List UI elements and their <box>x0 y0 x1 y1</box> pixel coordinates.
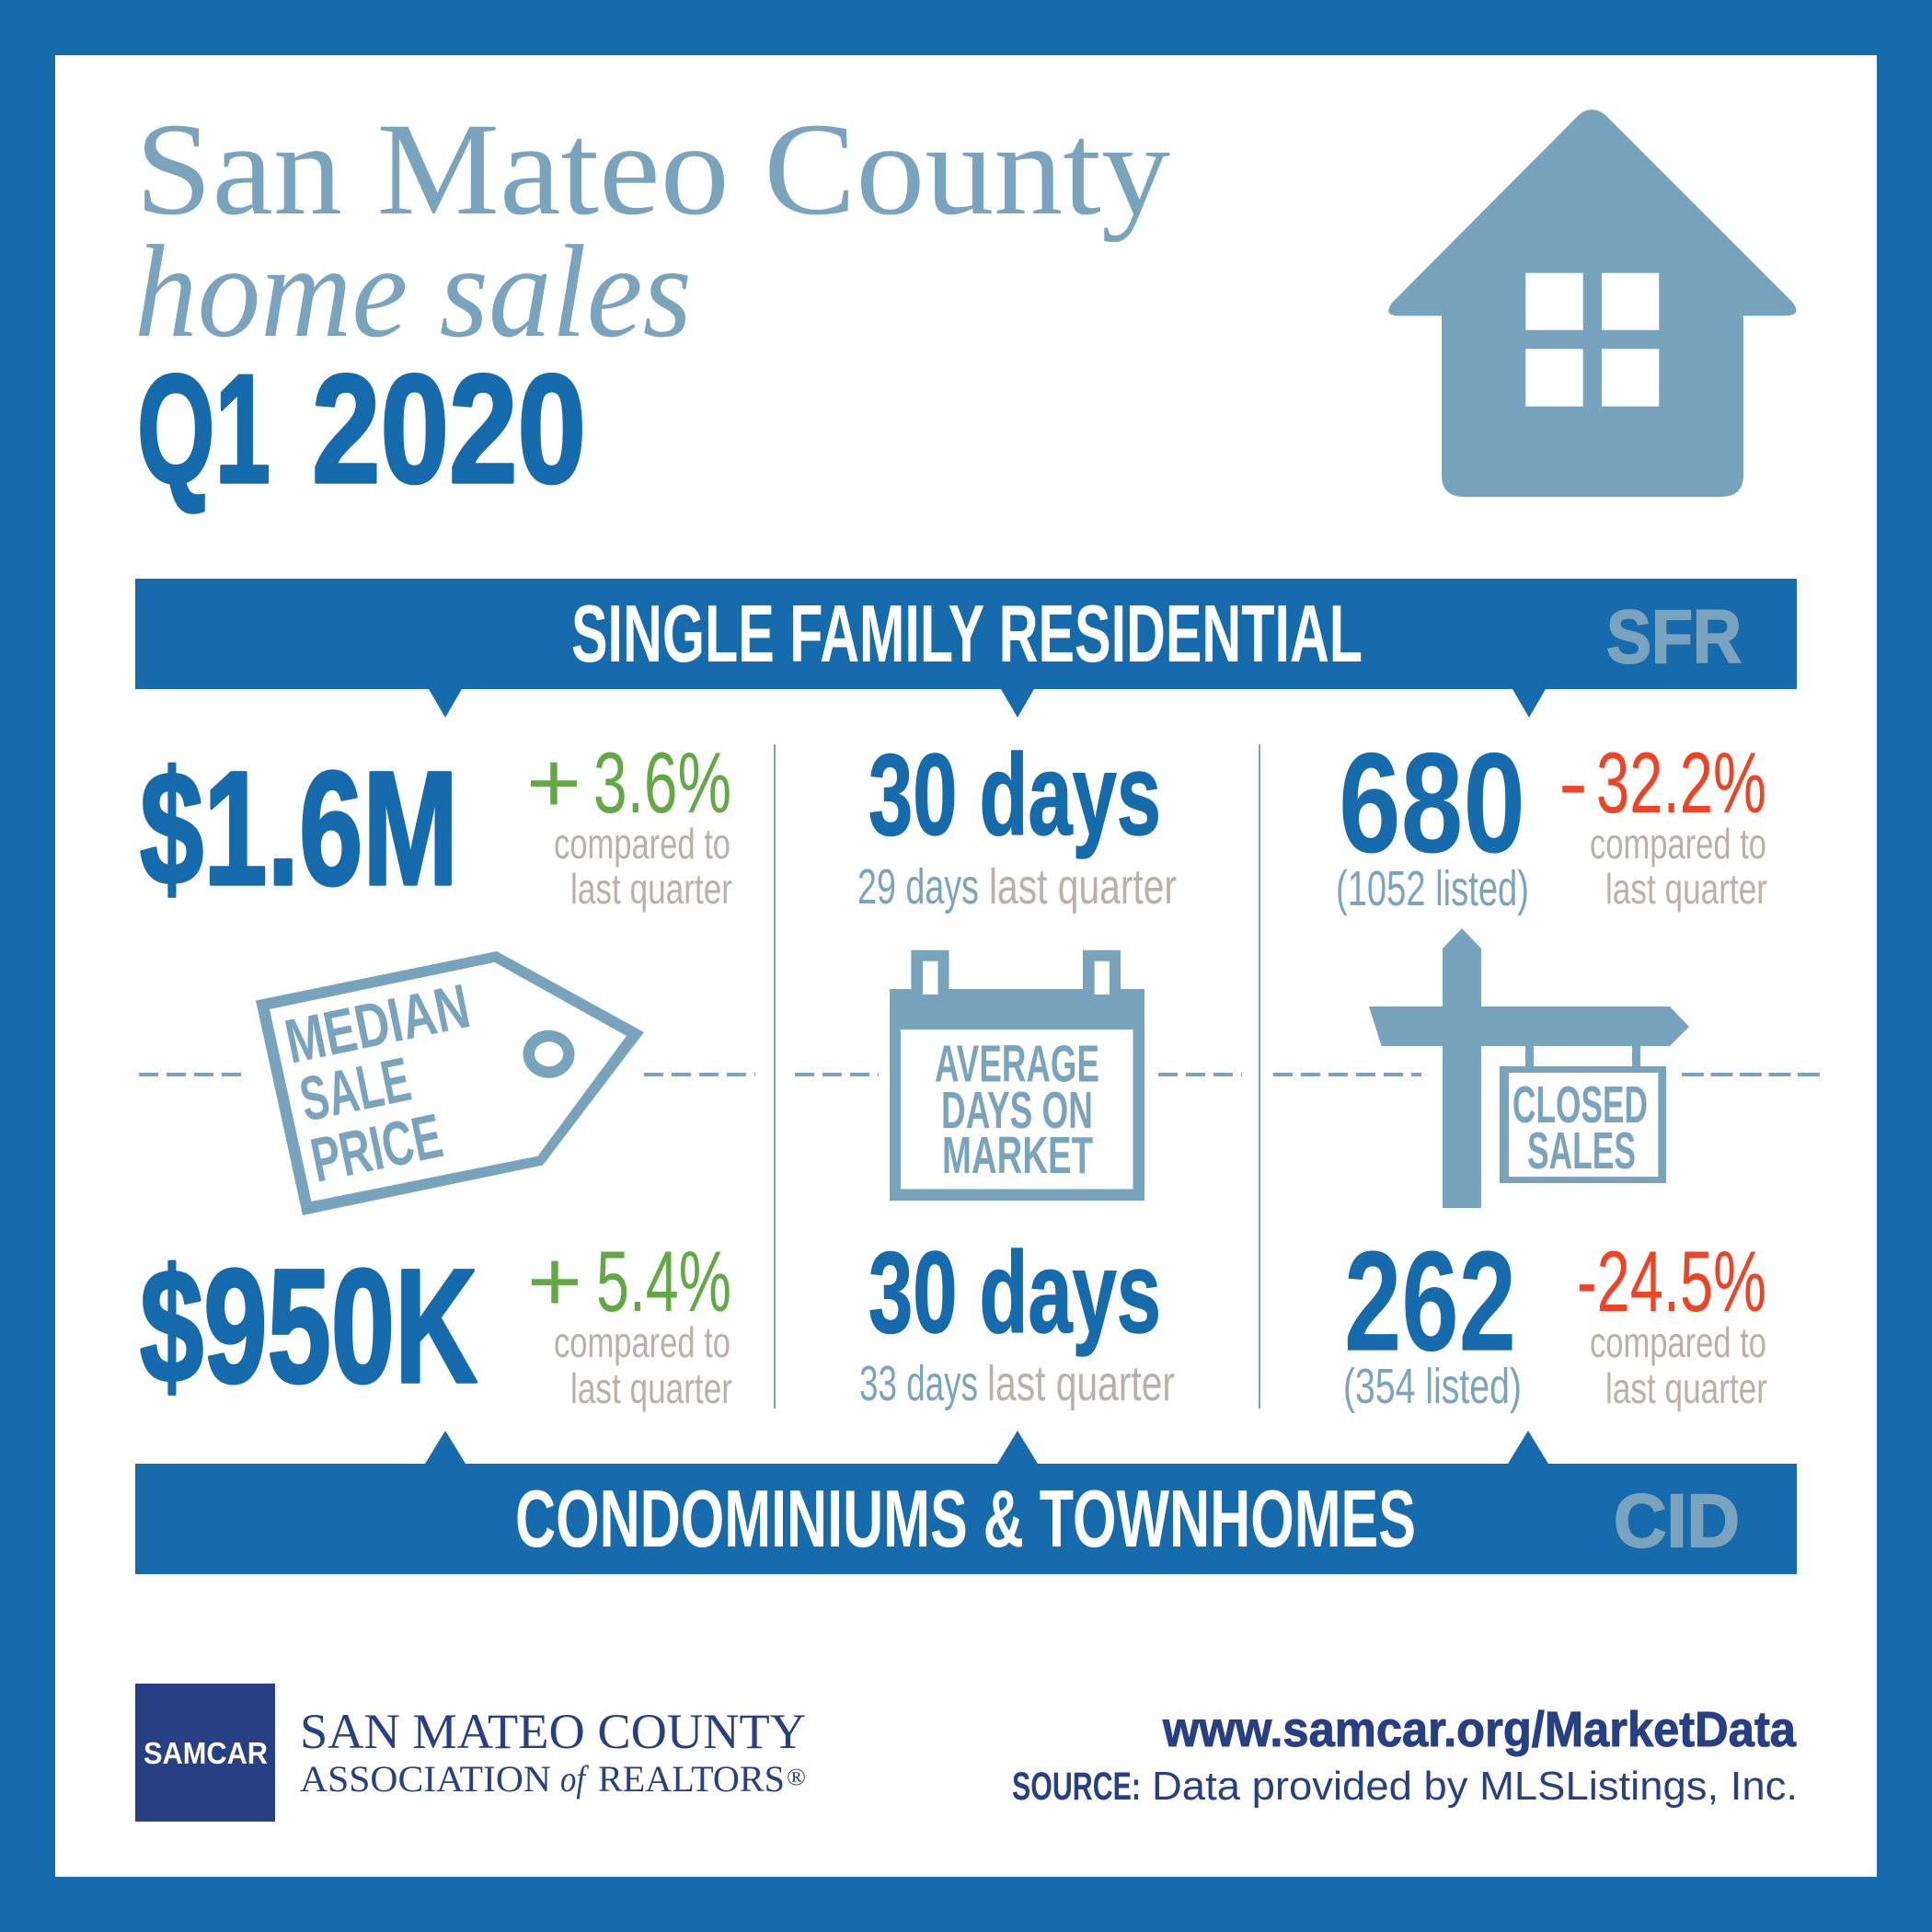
SFR closed sales: last quarter <box>1605 865 1767 913</box>
CID closed sales: last quarter <box>1605 1364 1767 1412</box>
CID median sale price: 5.4% <box>596 1233 731 1329</box>
CID closed sales: (354 listed) <box>1343 1359 1522 1414</box>
source note: Data provided by MLSListings, Inc. <box>1152 1764 1798 1809</box>
SFR average days on market: 30 days <box>868 731 1161 859</box>
icon: for sale sign: SALES <box>1527 1121 1636 1180</box>
CID average days on market: 33 days <box>859 1356 978 1411</box>
icon: price tag: PRICE <box>305 1100 448 1196</box>
banner: single family residential <box>135 579 1797 718</box>
organization name: of <box>560 1758 589 1800</box>
CID median sale price: $950K <box>140 1236 477 1417</box>
SFR median sale price: last quarter <box>570 865 732 913</box>
SFR closed sales: 32.2% <box>1596 734 1766 831</box>
CID closed sales: -24.5% <box>1577 1233 1766 1329</box>
organization name <box>300 1704 806 1800</box>
banner: single family residential: SINGLE FAMILY RESIDENTIAL <box>571 588 1363 679</box>
CID median sale price: compared to <box>554 1318 730 1366</box>
SFR median sale price: 3.6% <box>593 734 731 831</box>
CID average days on market: last quarter <box>987 1356 1175 1411</box>
organization name: ® <box>787 1764 806 1790</box>
SFR median sale price: + <box>526 734 581 831</box>
CID median sale price: last quarter <box>570 1364 732 1412</box>
CID closed sales <box>1343 1222 1767 1414</box>
title: San Mateo County <box>135 97 1170 243</box>
SFR median sale price: compared to <box>554 820 730 868</box>
website link: www.samcar.org/MarketData <box>1162 1702 1797 1757</box>
SFR closed sales: 680 <box>1339 723 1525 882</box>
title: home sales <box>134 219 692 365</box>
SFR closed sales <box>1336 723 1767 916</box>
CID median sale price: + <box>527 1233 582 1329</box>
banner: condominiums and townhomes: CONDOMINIUMS & TOWNHOMES <box>515 1473 1416 1564</box>
SFR closed sales: (1052 listed) <box>1336 861 1529 916</box>
icon: calendar: MARKET <box>942 1126 1093 1185</box>
SFR closed sales: compared to <box>1590 820 1766 868</box>
logo: SAMCAR: SAMCAR <box>144 1736 268 1770</box>
banner: condominiums and townhomes: CID <box>1614 1479 1740 1563</box>
icon: for sale sign: CLOSED <box>1512 1075 1648 1134</box>
icon: house <box>1388 109 1796 497</box>
SFR average days on market <box>857 731 1177 914</box>
column dividers <box>775 744 1259 1409</box>
SFR median sale price: $1.6M <box>140 739 458 919</box>
icon: for sale sign <box>1369 928 1689 1208</box>
CID closed sales: compared to <box>1590 1318 1766 1366</box>
title: Q1 <box>137 342 270 515</box>
SFR average days on market: last quarter <box>989 859 1177 914</box>
banner: condominiums and townhomes <box>135 1431 1797 1574</box>
icon: calendar <box>890 950 1144 1201</box>
SFR closed sales: - <box>1558 734 1588 831</box>
organization name: SAN MATEO COUNTY <box>300 1704 806 1759</box>
center dashed lines <box>139 1073 1820 1076</box>
organization name: ASSOCIATION <box>300 1758 551 1800</box>
title <box>134 97 1170 515</box>
CID average days on market <box>859 1229 1175 1411</box>
icon: price tag: SALE <box>294 1044 417 1135</box>
title: 2020 <box>312 342 586 515</box>
logo: SAMCAR <box>135 1684 275 1822</box>
source note: SOURCE: <box>1012 1765 1141 1809</box>
organization name: REALTORS <box>598 1758 785 1800</box>
icon: calendar: DAYS ON <box>941 1081 1093 1140</box>
icon: calendar: AVERAGE <box>935 1034 1099 1093</box>
CID closed sales: 262 <box>1344 1222 1516 1381</box>
icon: price tag <box>256 951 644 1215</box>
banner: single family residential: SFR <box>1606 595 1742 679</box>
CID average days on market: 30 days <box>868 1229 1161 1357</box>
icon: price tag: MEDIAN <box>280 971 476 1077</box>
SFR average days on market: 29 days <box>857 859 979 914</box>
